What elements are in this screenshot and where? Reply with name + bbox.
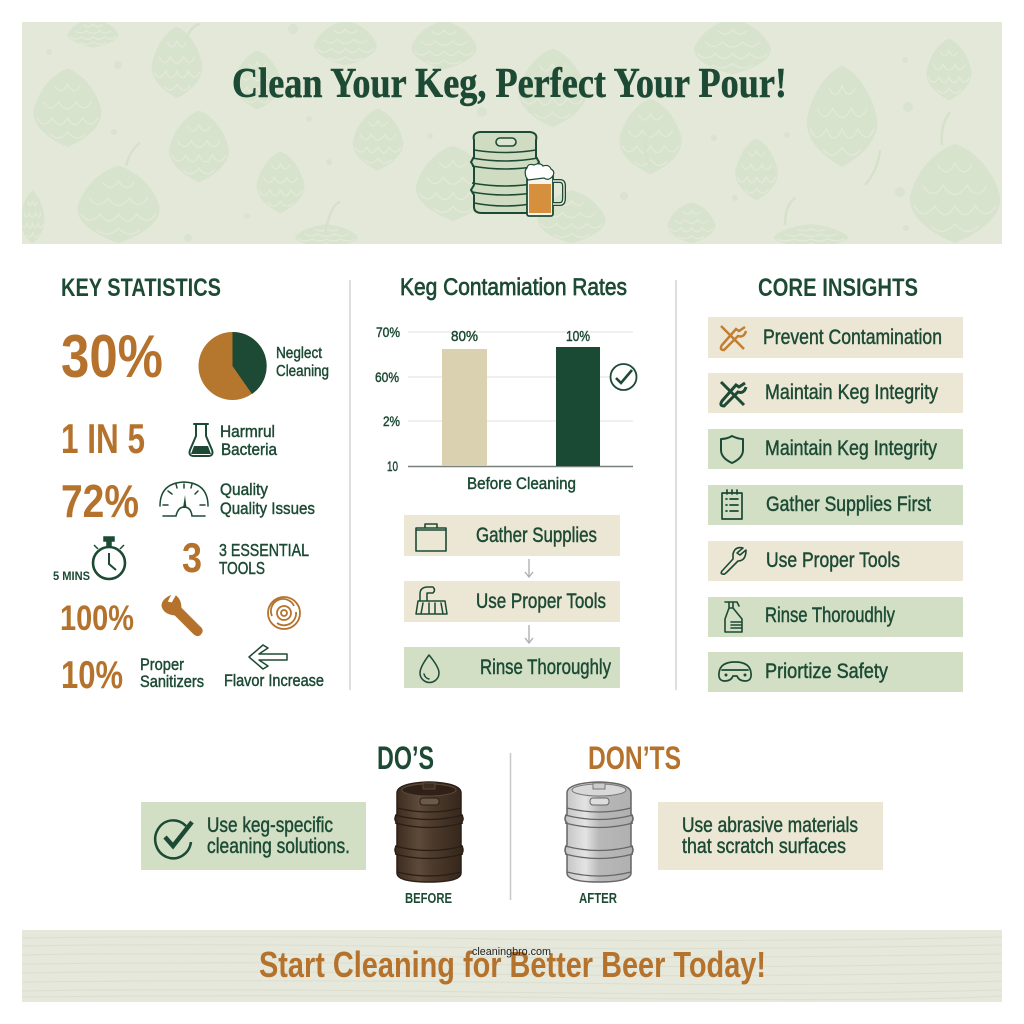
icon: check circle	[610, 364, 636, 390]
header banner	[20, 18, 1002, 248]
label: neglect cleaning	[276, 345, 329, 380]
stat: 3: 3	[182, 534, 202, 581]
step: use proper tools	[404, 581, 620, 622]
callout: do: Use keg-specific	[207, 814, 333, 837]
step: rinse thoroughly: Rinse Thoroughly	[480, 656, 611, 679]
stat: 10%: 10%	[61, 654, 123, 697]
panel: keg contamination rates	[375, 274, 636, 688]
label: 3 essential tools: TOOLS	[219, 558, 265, 578]
label: 5 mins: 5 MINS	[53, 569, 90, 583]
panel: core insights	[708, 274, 963, 692]
insight: prioritize safety: Priortize Safety	[765, 660, 888, 683]
step: rinse thoroughly	[404, 647, 620, 688]
title: Clean Your Keg, Perfect Your Pour!	[232, 61, 787, 107]
arrow	[525, 559, 533, 577]
stat: 100%: 100%	[60, 599, 134, 638]
callout: don't	[658, 802, 883, 870]
icon: dirty keg	[395, 782, 463, 882]
insight: use proper tools	[708, 541, 963, 581]
bar chart: Before Cleaning	[467, 474, 576, 493]
heading: core insights: CORE INSIGHTS	[758, 274, 918, 302]
step: use proper tools: Use Proper Tools	[476, 590, 606, 613]
label: proper sanitizers	[140, 655, 204, 691]
callout: don't: that scratch surfaces	[682, 835, 846, 858]
panel: key statistics	[53, 274, 329, 697]
label: flavor increase: Flavor Increase	[224, 671, 324, 690]
bar chart: 80%	[451, 329, 478, 345]
call to action: Start Cleaning for Better Beer Today!	[259, 944, 766, 985]
insight: gather supplies first	[708, 485, 963, 525]
bar chart: 70%	[376, 325, 400, 340]
watermark: cleaningbro.com	[472, 946, 551, 958]
bar chart	[375, 325, 633, 493]
insight: prioritize safety	[708, 652, 963, 692]
label: before: BEFORE	[405, 891, 452, 907]
icon: left arrow	[249, 645, 287, 669]
icon: gauge	[160, 482, 208, 516]
label: neglect cleaning: Neglect	[276, 345, 323, 362]
icon: stopwatch	[93, 537, 125, 579]
callout: don't: Use abrasive materials	[682, 814, 858, 837]
label: harmful bacteria: Bacteria	[221, 440, 277, 459]
icon: flask	[190, 424, 212, 456]
stat: 1 in 5: 1 IN 5	[61, 415, 145, 462]
arrow	[525, 625, 533, 643]
step: gather supplies	[404, 515, 620, 556]
bar chart: 10%	[566, 329, 590, 345]
label: harmful bacteria: Harmrul	[220, 422, 275, 441]
icon: clean keg	[565, 782, 633, 882]
icon: spiral	[268, 597, 300, 629]
callout: do: cleaning solutions.	[207, 835, 350, 858]
label: quality issues: Quality	[220, 480, 268, 499]
insight: prevent contamination	[708, 317, 963, 358]
pie chart	[198, 332, 267, 400]
label: 3 essential tools: 3 ESSENTIAL	[219, 540, 309, 560]
heading: key statistics: KEY STATISTICS	[61, 274, 221, 302]
insight: rinse thoroughly: Rinse Thoroudhly	[765, 604, 895, 627]
stat: 72%: 72%	[61, 475, 139, 527]
footer banner	[22, 930, 1002, 1002]
label: quality issues	[220, 480, 315, 518]
heading: contamination rates: Keg Contamiation Rates	[400, 274, 627, 301]
label: neglect cleaning: Cleaning	[276, 363, 329, 380]
bar chart: 10	[387, 459, 398, 474]
stat: 30%: 30%	[61, 323, 163, 390]
bar chart: 2%	[383, 414, 400, 429]
insight: use proper tools: Use Proper Tools	[766, 549, 900, 572]
heading: don'ts: DON’TS	[588, 740, 681, 776]
insight: maintain keg integrity: Maintain Keg Integrity	[765, 381, 938, 404]
label: 3 essential tools	[219, 540, 309, 578]
icon: wrench	[162, 596, 202, 636]
label: proper sanitizers: Sanitizers	[140, 672, 204, 691]
insight: maintain keg integrity shield	[708, 429, 963, 469]
insight: maintain keg integrity	[708, 373, 963, 413]
insight: maintain keg integrity shield: Maintain Keg Integrity	[765, 437, 937, 460]
bar chart: 60%	[375, 370, 399, 385]
label: harmful bacteria	[220, 422, 277, 459]
label: quality issues: Quality Issues	[220, 499, 315, 518]
heading: do's: DO’S	[377, 740, 434, 776]
insight: gather supplies first: Gather Supplies First	[766, 493, 931, 516]
label: proper sanitizers: Proper	[140, 655, 184, 674]
icon: keg and beer mug	[471, 132, 564, 216]
insight: prevent contamination: Prevent Contamination	[763, 326, 942, 349]
step: gather supplies: Gather Supplies	[476, 524, 597, 547]
insight: rinse thoroughly	[708, 597, 963, 637]
callout: do	[141, 802, 366, 870]
label: after: AFTER	[579, 891, 617, 907]
